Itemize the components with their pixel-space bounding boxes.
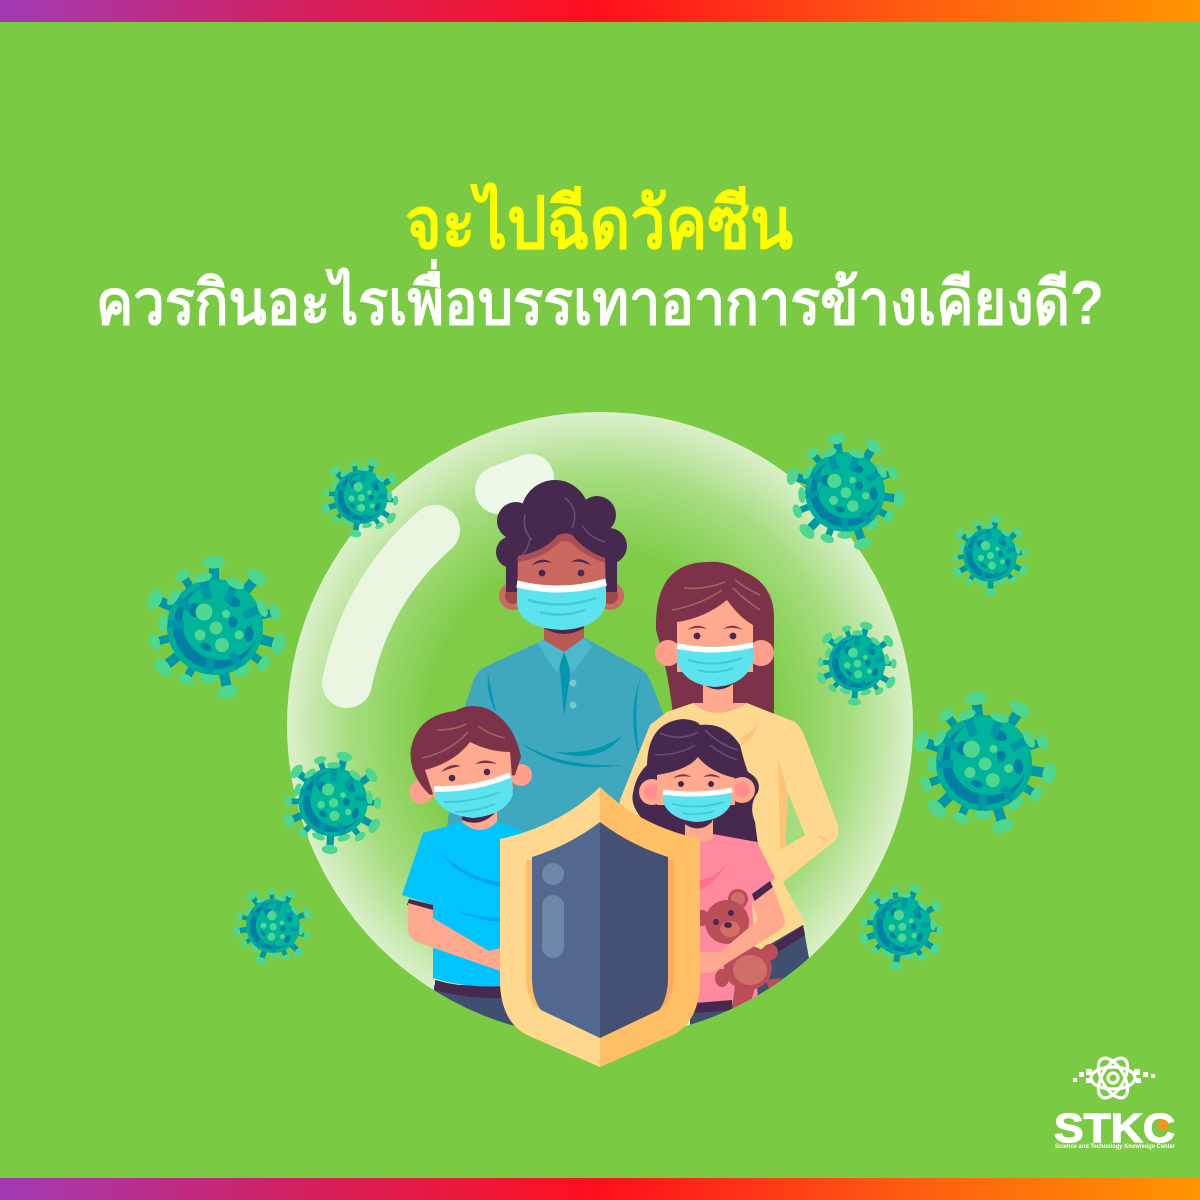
virus far right small [944,509,1037,602]
girl eyes and brows [673,774,721,787]
shield inner right edge [660,858,674,1010]
teddy bear [694,889,782,1012]
mother [620,562,838,998]
mother eyes and brows [687,626,743,639]
title line 1: จะไปฉีดวัคซีน [405,181,793,264]
shield inner left edge [526,858,540,1010]
shield right half [600,787,700,1067]
girl neck shadow [682,818,712,828]
virus left large [145,555,288,700]
father mask [517,579,606,630]
father hairline shadow [518,534,605,563]
protective bubble [287,412,913,1038]
boy neck shadow [462,813,495,823]
father ears [499,582,624,610]
bottom gradient bar [0,1178,1200,1200]
logo orange dot [1158,1120,1168,1130]
father shirt buttons [570,680,576,708]
girl shirt fold [700,852,730,890]
girl hair [632,719,759,845]
gap between arm and torso [785,793,805,847]
virus top left small [310,446,413,550]
shield face right [600,822,668,1038]
teddy head [705,900,749,944]
shield gloss dot [542,863,564,885]
virus right large [907,684,1064,843]
father hair [496,480,627,592]
boy mask [434,772,513,818]
shield gloss bar [542,895,564,958]
girl hair strands [655,730,738,760]
shield face left [532,822,600,1038]
logo atom emblem [1091,1053,1135,1103]
boy hair [411,706,521,795]
boy belt [435,980,502,998]
girl neck [685,820,713,842]
boy hair strands [422,724,505,758]
bubble highlight: long arc [347,530,435,683]
teddy muzzle [720,921,740,937]
bubble highlight: short blob [499,478,530,490]
mother hair [656,562,774,715]
girl ears [639,777,755,805]
mother hair strands [672,580,760,610]
logo: STKC [1054,1053,1175,1151]
boy shirt folds [440,852,505,922]
boy face [425,742,513,800]
girl sleeve band [752,881,773,902]
mother pants [752,925,809,998]
teddy face [713,910,734,928]
shield [500,787,700,1067]
father neck shadow [544,626,584,634]
mother mask [677,642,753,687]
father shirt [447,638,664,832]
girl [632,719,785,1030]
boy arm [408,903,500,971]
mother neck shadow [706,683,733,690]
logo wordmark: STKC [1054,1105,1175,1151]
title line 2: ควรกินอะไรเพื่อบรรเทาอาการข้างเคียงดี? [96,259,1104,338]
boy jeans [434,985,516,1026]
virus top right large [779,425,913,560]
father collar [537,638,592,673]
shield left half [500,787,600,1067]
girl face [657,757,735,805]
girl t-shirt [685,834,775,1004]
mother sweater folds [740,722,828,850]
father [447,480,664,832]
father face [517,534,606,586]
mother ears [655,640,774,666]
virus left middle [270,739,397,867]
teddy belly [733,955,767,985]
boy eyes and brows [441,760,497,781]
father eyes and brows [531,559,592,576]
boy sleeve band [407,899,433,911]
logo tagline: Science and Technology Knowledge Center [1055,1143,1175,1150]
boy neck [462,810,497,830]
mother sweater [620,703,838,950]
virus bottom right [846,870,959,983]
top gradient bar [0,0,1200,22]
mother neck [693,684,747,712]
virus inside right [806,611,909,716]
father neck [544,628,584,652]
mother belt [773,925,805,952]
logo pixel squares [1073,1069,1155,1083]
boy t-shirt [402,822,527,986]
girl belt [695,1000,733,1013]
teddy ears [694,889,748,926]
family illustration [402,480,838,1040]
mother face [677,600,753,672]
girl jeans [690,1000,730,1030]
title [96,181,1104,338]
teddy legs and body [715,944,782,1012]
girl arm [700,887,785,973]
father shirt folds [488,652,641,767]
girl mask [663,788,732,822]
boy [402,706,532,1040]
boy ears [409,764,532,804]
virus bottom left small [218,872,328,982]
father hair strands [517,498,605,560]
